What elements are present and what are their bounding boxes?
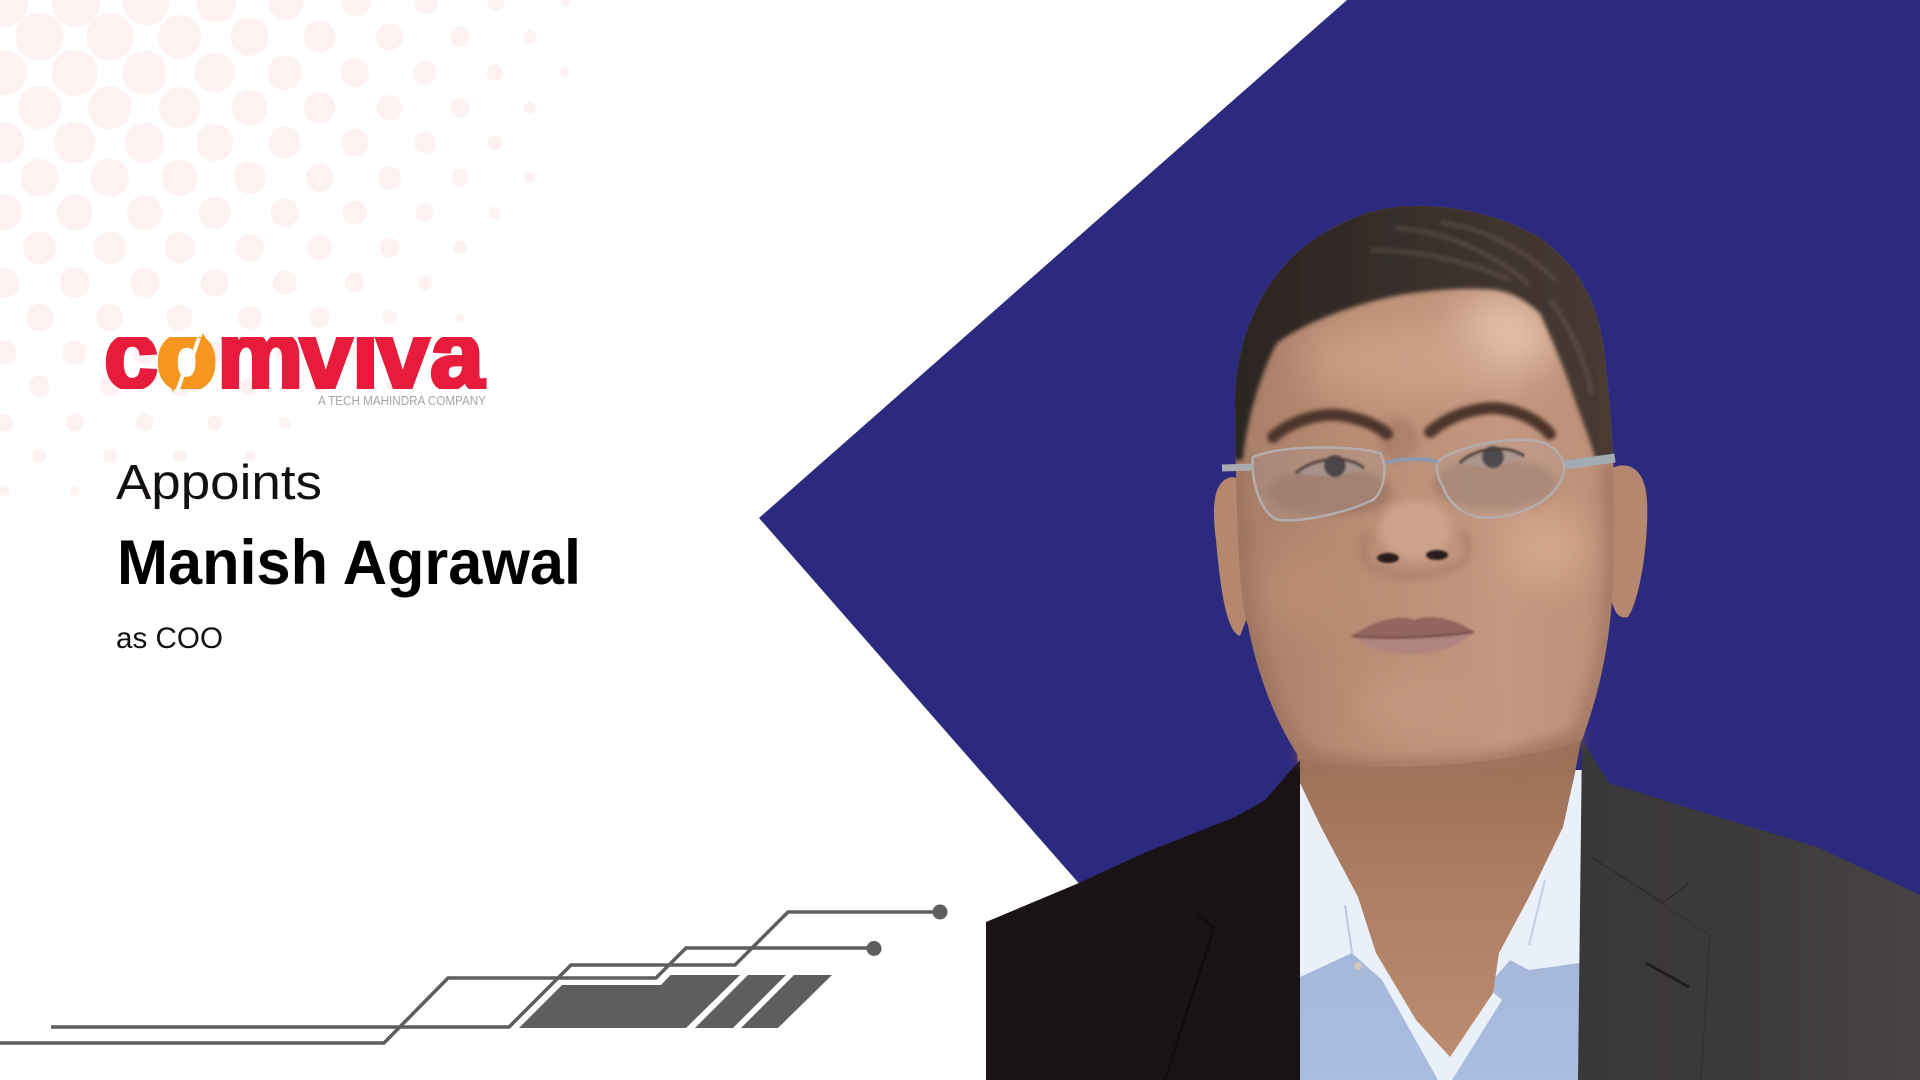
heading: Manish Agrawal: Manish Agrawal bbox=[117, 528, 581, 598]
navy arrow-shaped panel bbox=[759, 0, 1920, 1080]
glasses bbox=[1222, 440, 1615, 520]
heading: Appoints: Appoints bbox=[116, 456, 322, 510]
ears bbox=[1214, 465, 1647, 636]
cheek highlights bbox=[1510, 512, 1586, 584]
face bbox=[1235, 206, 1614, 766]
eyes bbox=[1296, 446, 1524, 477]
logo tagline: A TECH MAHINDRA COMPANY bbox=[318, 394, 487, 408]
hair highlights bbox=[1370, 222, 1592, 395]
jacket lapel details bbox=[1165, 857, 1710, 1080]
lower circuit trace bbox=[0, 941, 882, 1043]
forehead highlight bbox=[1455, 297, 1555, 373]
logo wordmark: comviva bbox=[104, 300, 485, 409]
upper circuit trace bbox=[51, 904, 948, 1027]
nose bbox=[1363, 500, 1468, 576]
hair bbox=[1225, 200, 1625, 460]
logo: Comviva bbox=[106, 333, 487, 405]
chin line bbox=[1300, 735, 1580, 768]
mouth bbox=[1352, 617, 1474, 654]
logo spark tips bbox=[168, 333, 211, 393]
circuit line decoration bbox=[0, 904, 948, 1043]
shirt base bbox=[1298, 770, 1582, 1080]
filled circuit blocks bbox=[519, 975, 832, 1028]
halftone dot pattern bbox=[0, 0, 571, 496]
neck bbox=[1296, 735, 1582, 1057]
face edge shading bbox=[1238, 460, 1612, 779]
text: as COO: as COO bbox=[116, 622, 223, 655]
eye sockets bbox=[1268, 468, 1392, 516]
right jacket panel bbox=[1578, 740, 1920, 1080]
left jacket panel bbox=[986, 760, 1300, 1080]
portrait of Manish Agrawal bbox=[986, 200, 1920, 1080]
eyebrows bbox=[1273, 408, 1550, 437]
